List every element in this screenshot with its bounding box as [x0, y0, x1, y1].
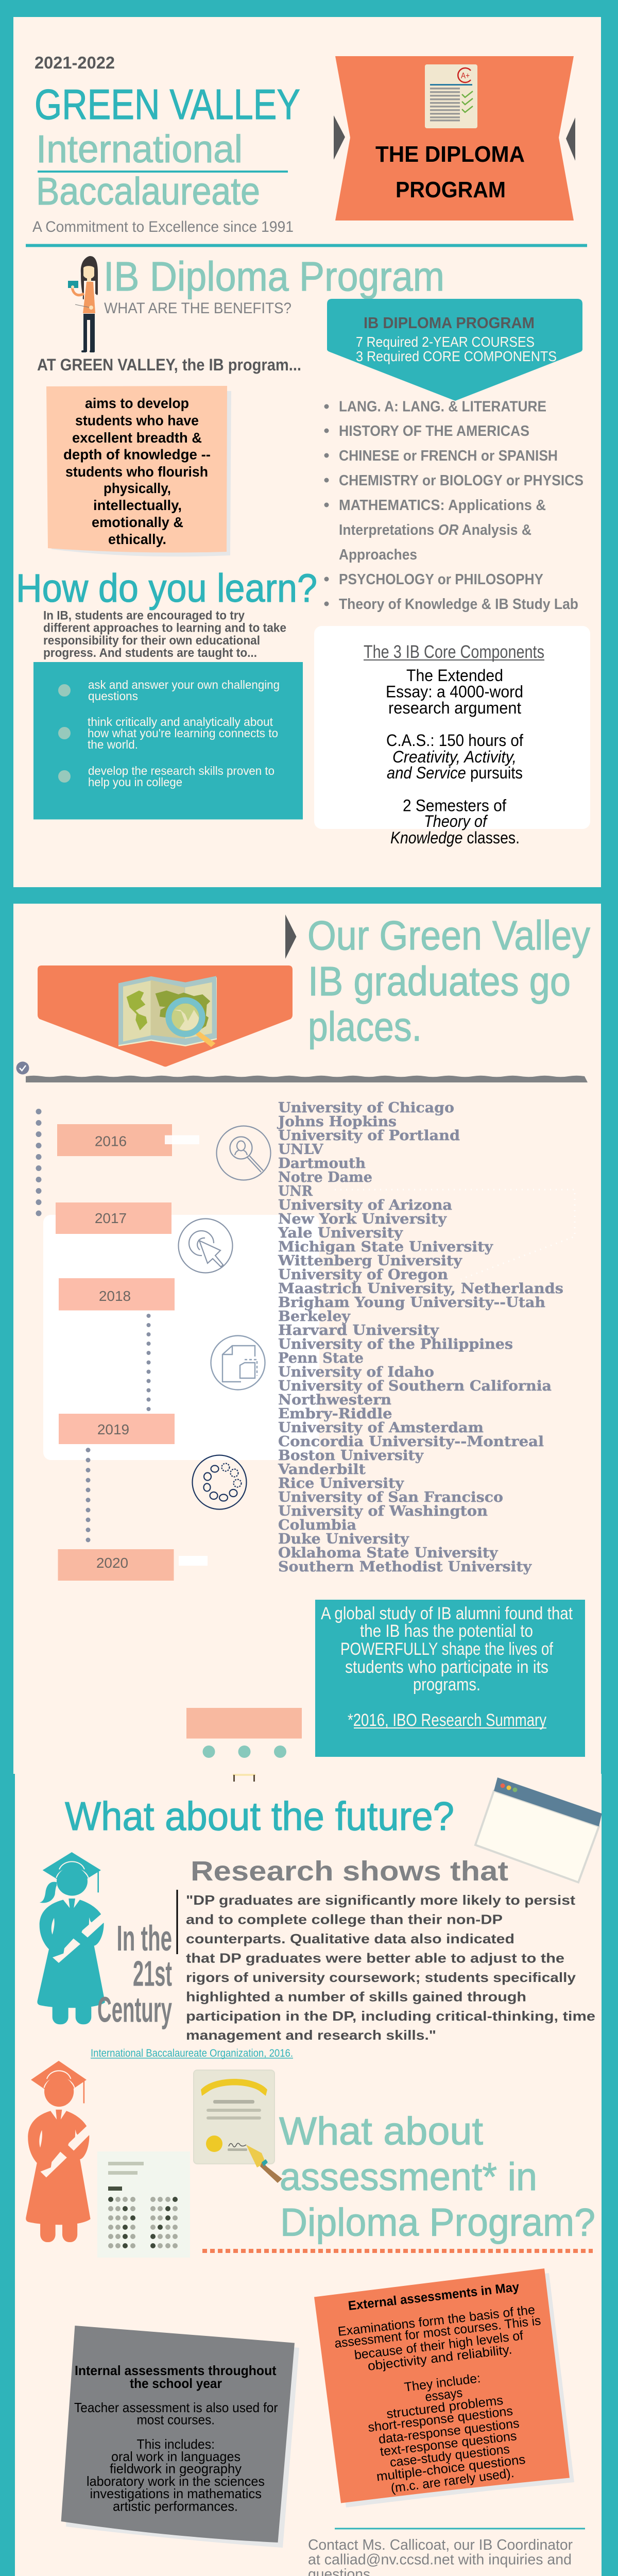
sticky note: external assessments: They include:: [403, 2371, 482, 2395]
quote: research: management and research skills.": [186, 2027, 436, 2043]
heading: graduates go places: places.: [308, 1004, 422, 1049]
heading: graduates go places: Our Green Valley: [307, 912, 590, 958]
blank peach card with dots: [186, 1708, 302, 1758]
timeline dots: second run: [146, 1314, 150, 1411]
callout: global study: students who participate in its: [345, 1657, 548, 1677]
sticky note: internal assessments: most courses.: [137, 2412, 215, 2428]
sticky note: external assessments: (m.c. are rarely used).: [390, 2466, 515, 2496]
contact block: Contact Ms. Callicoat, our IB Coordinator: [308, 2537, 573, 2553]
panel: core components: [314, 626, 590, 847]
sticky note: internal assessments: [61, 2326, 299, 2548]
sticky note: external assessments: essays: [424, 2385, 464, 2404]
bullet: questions: ask and answer your own challenging: [88, 678, 280, 691]
list: university destinations: Concordia University--Montreal: [278, 1434, 544, 1450]
list: university destinations: UNR: [278, 1183, 313, 1199]
list: university destinations: Wittenberg University: [278, 1253, 462, 1269]
panel: core components: research argument: [388, 699, 521, 717]
quote: research: and to complete college than their non-DP: [186, 1911, 503, 1927]
heading: How do you learn: How do you learn?: [16, 566, 317, 611]
faint dotted path: [335, 1190, 575, 1279]
icon: diploma certificate and pen: [194, 2070, 282, 2183]
sticky note: external assessments: text-response questions: [379, 2429, 518, 2459]
timeline: 2018: [59, 1278, 175, 1311]
list: required courses: Theory of Knowledge & IB Study Lab: [339, 596, 578, 613]
paragraph: approaches to learning: different approaches to learning and to take: [43, 621, 286, 635]
bullet: research skills: help you in college: [88, 775, 182, 789]
bullet: critical thinking: think critically and analytically about: [88, 715, 273, 728]
sticky note: aims: students who have: [75, 412, 199, 429]
teal divider: [26, 244, 587, 247]
sticky note: external assessments: structured problems: [386, 2393, 504, 2421]
banner: the diploma program: THE DIPLOMA: [375, 142, 525, 167]
quote: research: "DP graduates are significantly more likely to persist: [186, 1892, 575, 1908]
timeline: 2017: [56, 1202, 171, 1234]
contact block: at calliad@nv.ccsd.net with inquiries and: [308, 2551, 572, 2568]
panel: core components: C.A.S.: 150 hours of: [386, 731, 523, 750]
sticky note: aims: depth of knowledge --: [63, 446, 211, 463]
sticky note: internal assessments: Teacher assessment is also used for: [74, 2400, 278, 2415]
sticky note: external assessments: data-response questions: [377, 2416, 520, 2447]
arrow marker: [285, 914, 297, 959]
list: university destinations: Johns Hopkins: [277, 1114, 397, 1130]
callout: global study: POWERFULLY shape the lives of: [340, 1639, 553, 1659]
list: university destinations: Boston University: [278, 1448, 424, 1464]
stool fragment: [233, 1774, 255, 1782]
timeline dots: first run: [36, 1109, 41, 1216]
heading: graduates go places: [307, 912, 590, 1049]
sticky note: internal assessments: investigations in mathematics: [90, 2486, 262, 2501]
list: university destinations: [277, 1100, 563, 1575]
sticky note: external assessments: Examinations form the basis of the: [337, 2302, 536, 2339]
icon: documents: [211, 1335, 265, 1390]
label: in the 21st century: In the: [116, 1918, 172, 1958]
sticky note: aims: aims to develop: [85, 395, 189, 411]
panel: core components: Creativity, Activity,: [392, 748, 517, 766]
timeline: 2020: [58, 1549, 208, 1581]
list: university destinations: University of Chicago: [278, 1100, 454, 1116]
bullet: research skills: [58, 764, 274, 789]
heading: research shows that: Research shows that: [191, 1856, 508, 1887]
icon: teal graduate: [37, 1852, 105, 2024]
icon: cursor click: [178, 1219, 233, 1273]
bullet: critical thinking: how what you're learning connects to: [88, 726, 278, 740]
sticky note: internal assessments: Internal assessments throughout: [75, 2363, 277, 2378]
list: university destinations: Maastrich University, Netherlands: [278, 1281, 563, 1297]
heading: IB Diploma Program: IB Diploma Program: [104, 253, 444, 299]
title: International Baccalaureate: International: [36, 127, 243, 171]
panel: graduates: [13, 904, 601, 1774]
source link: IB 2016: International Baccalaureate Organization, 2016.: [91, 2047, 293, 2059]
title: Green Valley: GREEN VALLEY: [35, 80, 300, 128]
panel: future and assessment: [15, 1774, 602, 2576]
heading: assessment: What about: [279, 2109, 483, 2154]
dotted orange divider: [202, 2249, 593, 2253]
list: university destinations: Michigan State University: [278, 1239, 493, 1255]
list: university destinations: Rice University: [278, 1476, 404, 1492]
heading: graduates go places: IB graduates go: [308, 958, 571, 1004]
timeline: 2016: 2016: [95, 1133, 127, 1149]
icon: browser window: [475, 1777, 602, 1883]
paragraph: approaches to learning: responsibility for their own educational: [43, 634, 260, 648]
list: university destinations: Vanderbilt: [278, 1462, 366, 1478]
banner: the diploma program: [334, 56, 575, 221]
list: required courses: MATHEMATICS: Applications &: [339, 497, 546, 514]
list: university destinations: Oklahoma State University: [278, 1545, 499, 1561]
sticky note: aims: physically,: [104, 480, 171, 496]
callout: global study: A global study of IB alumni found that: [321, 1604, 573, 1623]
timeline: 2016: [57, 1124, 199, 1156]
list: university destinations: University of San Francisco: [278, 1489, 503, 1505]
sticky note: internal assessments: the school year: [130, 2376, 222, 2391]
list: university destinations: Notre Dame: [278, 1170, 372, 1185]
list: university destinations: Harvard University: [278, 1323, 439, 1338]
list: required courses: Approaches: [339, 547, 417, 563]
callout: global study: programs.: [413, 1675, 480, 1694]
title: International Baccalaureate: [36, 127, 288, 213]
list: university destinations: University of Southern California: [278, 1378, 552, 1394]
quote: research: that DP graduates were better able to adjust to the: [186, 1951, 564, 1966]
list: university destinations: UNLV: [278, 1142, 324, 1158]
icon: graded paper: A+: [461, 72, 470, 80]
panel: core components: Theory of: [424, 812, 488, 831]
list: university destinations: Columbia: [278, 1517, 356, 1533]
panel: core components: and Service pursuits: [387, 764, 523, 782]
sticky note: aims: students who flourish: [65, 464, 208, 480]
callout: global study: the IB has the potential to: [360, 1621, 533, 1641]
timeline: 2019: [59, 1414, 175, 1444]
icon: orange graduate: [26, 2061, 91, 2242]
sticky note: external assessments: short-response questions: [367, 2404, 513, 2435]
sticky note: internal assessments: fieldwork in geography: [110, 2461, 242, 2477]
panel: learning skills: [33, 662, 303, 819]
list: university destinations: Brigham Young University--Utah: [278, 1295, 545, 1311]
heading: assessment: assessment* in: [280, 2155, 537, 2199]
sticky note: aims: ethically.: [108, 531, 166, 547]
list: university destinations: Berkeley: [278, 1309, 351, 1325]
wavy divider: [26, 1076, 588, 1082]
sticky note: external assessments: [314, 2268, 574, 2507]
list: university destinations: Embry-Riddle: [278, 1406, 392, 1422]
sticky note: aims: intellectually,: [93, 497, 182, 513]
heading: assessment: [279, 2109, 595, 2244]
list: university destinations: University of Amsterdam: [278, 1420, 484, 1436]
list: required courses: Interpretations OR Analysis &: [339, 522, 531, 538]
school year: 2021-2022: [35, 53, 115, 72]
sticky note: internal assessments: oral work in languages: [111, 2449, 241, 2464]
sticky note: external assessments: objectivity and reliability.: [367, 2342, 513, 2374]
callout: program requirements: [327, 299, 582, 401]
list: university destinations: University of Arizona: [278, 1197, 452, 1213]
list: university destinations: Northwestern: [278, 1392, 391, 1408]
icon: check badge: [16, 1061, 29, 1075]
list: required courses: HISTORY OF THE AMERICAS: [339, 423, 529, 439]
quote: research: counterparts. Qualitative data also indicated: [186, 1931, 514, 1946]
timeline: white backdrop: [43, 1215, 319, 1460]
sticky note: internal assessments: artistic performances.: [113, 2499, 238, 2514]
timeline: 2017: 2017: [95, 1210, 127, 1226]
subheading: benefits: WHAT ARE THE BENEFITS?: [104, 300, 291, 317]
sticky note: external assessments: multiple-choice questions: [375, 2452, 526, 2484]
quote: research: rigors of university coursework; students specifically: [186, 1970, 576, 1985]
paragraph: approaches to learning: progress. And students are taught to...: [43, 646, 257, 660]
sticky note: internal assessments: laboratory work in the sciences: [87, 2473, 265, 2489]
list: required courses: LANG. A: LANG. & LITERATURE: [339, 399, 546, 415]
icon: graded paper: [425, 64, 477, 128]
list: university destinations: University of the Philippines: [278, 1336, 513, 1352]
bullet: questions: [58, 678, 280, 703]
timeline: 2019: 2019: [97, 1421, 129, 1437]
paragraph: approaches to learning: [43, 609, 286, 660]
list: university destinations: Yale University: [278, 1225, 403, 1241]
label: in the 21st century: 21st: [133, 1954, 172, 1994]
sticky note: external assessments: because of their high levels of: [353, 2328, 524, 2363]
list: university destinations: University of Portland: [278, 1128, 460, 1144]
quote: research: [186, 1892, 595, 2043]
list: university destinations: University of Idaho: [278, 1364, 434, 1380]
list: required courses: CHEMISTRY or BIOLOGY or PHYSICS: [339, 472, 583, 489]
panel: core components: The Extended: [406, 666, 503, 685]
panel: core components: Knowledge classes.: [390, 828, 520, 847]
list: university destinations: University of Washington: [278, 1503, 488, 1519]
list: university destinations: Penn State: [278, 1350, 364, 1366]
contact block: [308, 2528, 585, 2576]
sticky note: external assessments: External assessments in May: [348, 2280, 520, 2313]
banner: the diploma program: PROGRAM: [396, 177, 506, 202]
label: in the 21st century: [97, 1918, 172, 2030]
panel: core components: 2 Semesters of: [403, 796, 506, 815]
icon: search person: [216, 1126, 271, 1180]
sticky note: aims: emotionally &: [92, 514, 183, 530]
icon: loading beads: [193, 1455, 246, 1510]
bullet: research skills: develop the research skills proven to: [88, 764, 274, 777]
callout: program requirements: 7 Required 2-YEAR COURSES: [356, 334, 535, 350]
icon: map and magnifier: [118, 976, 217, 1047]
list: university destinations: New York University: [278, 1211, 447, 1227]
badge: world map: [38, 965, 293, 1066]
bullet: questions: questions: [88, 689, 138, 703]
sticky note: aims: excellent breadth &: [72, 430, 202, 446]
heading: assessment: Diploma Program?: [280, 2201, 595, 2244]
callout: global study: [315, 1600, 585, 1757]
quote: research: highlighted a number of skills gained through: [186, 1989, 526, 2004]
timeline: 2020: 2020: [96, 1555, 128, 1571]
bullet: critical thinking: [58, 715, 278, 751]
quote: research: participation in the DP, including critical-thinking, time: [186, 2008, 595, 2024]
vertical rule: [176, 1890, 178, 1954]
sticky note: external assessments: case-study questions: [389, 2442, 510, 2470]
list: university destinations: University of Oregon: [278, 1267, 448, 1283]
heading: future: What about the future?: [65, 1793, 454, 1839]
timeline: 2018: 2018: [99, 1288, 131, 1304]
panel: core components: The 3 IB Core Components: [364, 642, 544, 662]
list: university destinations: Duke University: [278, 1531, 409, 1547]
lead-in: AT GREEN VALLEY, the IB program...: [37, 355, 301, 374]
timeline dots: third run: [85, 1448, 91, 1543]
callout: program requirements: 3 Required CORE COMPONENTS: [356, 348, 557, 364]
list: required courses: PSYCHOLOGY or PHILOSOPHY: [339, 571, 543, 588]
title: International Baccalaureate: Baccalaureate: [36, 170, 260, 213]
tagline: A Commitment to Excellence since 1991: [32, 218, 294, 235]
list: university destinations: Dartmouth: [278, 1156, 366, 1172]
icon: answer sheet: [97, 2151, 190, 2258]
sticky note: internal assessments: This includes:: [137, 2436, 215, 2452]
callout: program requirements: IB DIPLOMA PROGRAM: [364, 314, 535, 332]
panel: core components: Essay: a 4000-word: [386, 682, 523, 701]
list: university destinations: Southern Methodist University: [278, 1559, 532, 1575]
label: in the 21st century: Century: [97, 1990, 172, 2030]
callout: global study: *2016, IBO Research Summary: [348, 1710, 546, 1730]
list: required courses: [324, 399, 583, 613]
panel: introduction and program overview: [13, 17, 601, 887]
list: required courses: CHINESE or FRENCH or SPANISH: [339, 448, 558, 464]
bullet: critical thinking: the world.: [88, 738, 138, 751]
icon: student with book: [68, 256, 98, 352]
sticky note: aims: [46, 386, 231, 556]
paragraph: approaches to learning: In IB, students are encouraged to try: [43, 609, 245, 622]
sticky note: external assessments: assessment for most courses. This is: [334, 2313, 542, 2351]
